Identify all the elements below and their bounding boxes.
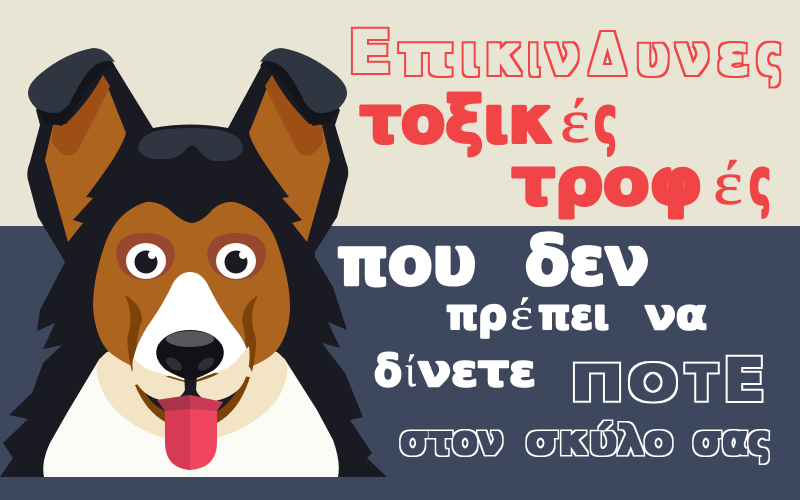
dog: brown face xyxy=(93,202,290,367)
text: outlined ΠΟΤΕ: Ε xyxy=(723,346,765,414)
text: πρέπει xyxy=(446,290,609,339)
eye patch xyxy=(207,233,266,280)
text: δίνετε: δ xyxy=(374,346,402,397)
text: outlined ΠΟΤΕ xyxy=(570,346,765,414)
left nostril xyxy=(164,355,184,373)
heading: outlined word Επικίνδυνες: π xyxy=(397,24,455,87)
eye white xyxy=(126,243,166,279)
heading: outlined word Επικίνδυνες: ν xyxy=(546,24,579,87)
dog: right muzzle stripe xyxy=(242,295,258,372)
dog: grey forehead patch xyxy=(138,128,243,161)
dog: right eye xyxy=(207,233,266,280)
ear: shaded inner xyxy=(52,75,110,156)
dog: tongue xyxy=(157,395,223,470)
text: πρέπει: πρ xyxy=(446,290,507,339)
dog: left muzzle stripe xyxy=(125,295,142,372)
text: outlined ΠΟΤΕ: Ο xyxy=(628,356,678,412)
highlight xyxy=(239,251,247,259)
dog: left eye xyxy=(116,233,175,280)
right nostril xyxy=(196,355,216,373)
heading: outlined word Επικίνδυνες: ν xyxy=(676,24,709,87)
dog: black fur silhouette xyxy=(0,63,387,477)
heading: outlined word Επικίνδυνες: ι xyxy=(529,24,539,87)
background: beige upper band xyxy=(0,0,800,226)
dog: cream neck ring xyxy=(96,330,288,438)
dog: left cheek xyxy=(132,358,185,401)
dog: nose xyxy=(156,330,224,380)
heading: red word τροφές: τροφ xyxy=(512,146,702,220)
heading: outlined word Επικίνδυνες: Δ xyxy=(590,23,626,88)
heading: red word τοξικές: ς xyxy=(594,84,617,158)
dog: right ear xyxy=(249,48,347,242)
dog: white chest xyxy=(43,358,339,477)
eye white xyxy=(216,243,256,279)
text: outlined ΠΟΤΕ: Τ xyxy=(686,356,717,412)
tongue shade left xyxy=(157,395,190,411)
text: που: που xyxy=(337,223,476,300)
heading: red word τροφές: έ xyxy=(713,150,743,218)
text: δίνετε xyxy=(374,346,536,397)
text: δεν: δεν xyxy=(525,223,649,300)
text: να: να xyxy=(645,290,707,339)
text: outlined σας: σας xyxy=(693,418,770,464)
dog: left ear xyxy=(28,48,126,242)
text: outlined σκύλο: σκύλο xyxy=(526,418,673,464)
tongue left half xyxy=(157,395,190,470)
heading: outlined word Επικίνδυνες: ι xyxy=(461,24,479,87)
text: πρέπει: έ xyxy=(510,290,533,339)
dog: mouth xyxy=(135,370,250,423)
heading: outlined word Επικίνδυνες: κ xyxy=(485,24,523,87)
dog: mouth interior xyxy=(145,380,236,412)
ear: brown inner xyxy=(45,75,126,242)
ear: dark fold shadow xyxy=(36,55,115,126)
text: δίνετε: νετε xyxy=(418,346,536,397)
tongue right half xyxy=(190,395,223,470)
nose shape xyxy=(156,330,224,380)
text: outlined ΠΟΤΕ: Π xyxy=(570,356,624,412)
text: πρέπει: πει xyxy=(538,290,609,339)
highlight xyxy=(148,251,156,259)
pupil xyxy=(224,250,248,274)
heading: red word τοξικές: έ xyxy=(560,88,590,156)
background: navy lower band xyxy=(0,226,800,500)
eye patch xyxy=(116,233,175,280)
dog: right cheek xyxy=(196,346,250,401)
dog: philtrum xyxy=(184,372,197,395)
pupil xyxy=(134,250,158,274)
heading: red word τοξικές: τοξικ xyxy=(360,84,554,158)
heading: outlined word Επικίνδυνες: Ε xyxy=(348,18,392,86)
text: δίνετε: ί xyxy=(405,347,416,396)
heading: red word τροφές: ς xyxy=(749,146,771,220)
heading: outlined word Επικίνδυνες xyxy=(348,18,781,88)
illustration: dog xyxy=(0,48,387,477)
heading: red word τροφές xyxy=(512,146,771,220)
ear: grey flap xyxy=(28,48,115,113)
heading: outlined word Επικίνδυνες: ε xyxy=(717,24,750,87)
nose highlight xyxy=(166,331,214,347)
heading: outlined word Επικίνδυνες: ς xyxy=(757,24,781,87)
heading: outlined word Επικίνδυνες: υ xyxy=(636,24,669,87)
text: outlined στον: στον xyxy=(400,418,503,464)
tongue shade right xyxy=(190,395,223,411)
dog: white blaze xyxy=(133,272,249,382)
